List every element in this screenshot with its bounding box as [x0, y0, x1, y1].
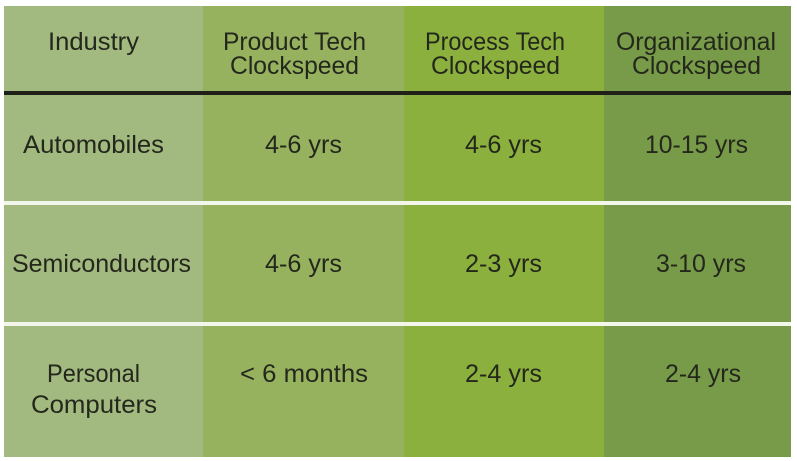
heading: process tech clockspeed: Clockspeed [431, 52, 560, 80]
heading: product tech clockspeed: Clockspeed [230, 52, 359, 80]
row: personal computers: < 6 months [240, 360, 368, 388]
header row [48, 28, 776, 80]
heading: industry: Industry [48, 28, 140, 56]
row: automobiles: 4-6 yrs [265, 131, 342, 159]
heading: process tech clockspeed [425, 28, 565, 80]
row: personal computers: 2-4 yrs [665, 360, 741, 388]
row: semiconductors [12, 250, 746, 278]
column: industry background [4, 6, 203, 457]
heading: product tech clockspeed [223, 28, 366, 80]
row: semiconductors: Semiconductors [12, 250, 191, 278]
column: process tech background [404, 6, 604, 457]
heading: organizational clockspeed: Clockspeed [632, 52, 761, 80]
heading: organizational clockspeed [616, 28, 776, 80]
header rule [4, 91, 791, 95]
row: personal computers: Computers [31, 391, 157, 419]
heading: process tech clockspeed: Process Tech [425, 28, 565, 56]
row: semiconductors: 3-10 yrs [656, 250, 746, 278]
row: semiconductors: 2-3 yrs [465, 250, 542, 278]
row: personal computers [31, 360, 741, 419]
heading: organizational clockspeed: Organizational [616, 28, 776, 56]
heading: product tech clockspeed: Product Tech [223, 28, 366, 56]
row: automobiles: Automobiles [23, 131, 164, 159]
row: semiconductors: 4-6 yrs [265, 250, 342, 278]
row: personal computers: Personal [47, 360, 140, 388]
row: automobiles [23, 131, 748, 159]
row: personal computers: 2-4 yrs [465, 360, 542, 388]
column: organizational background [604, 6, 791, 457]
row: automobiles: 4-6 yrs [465, 131, 542, 159]
column: product tech background [203, 6, 404, 457]
row: automobiles: 10-15 yrs [645, 131, 748, 159]
